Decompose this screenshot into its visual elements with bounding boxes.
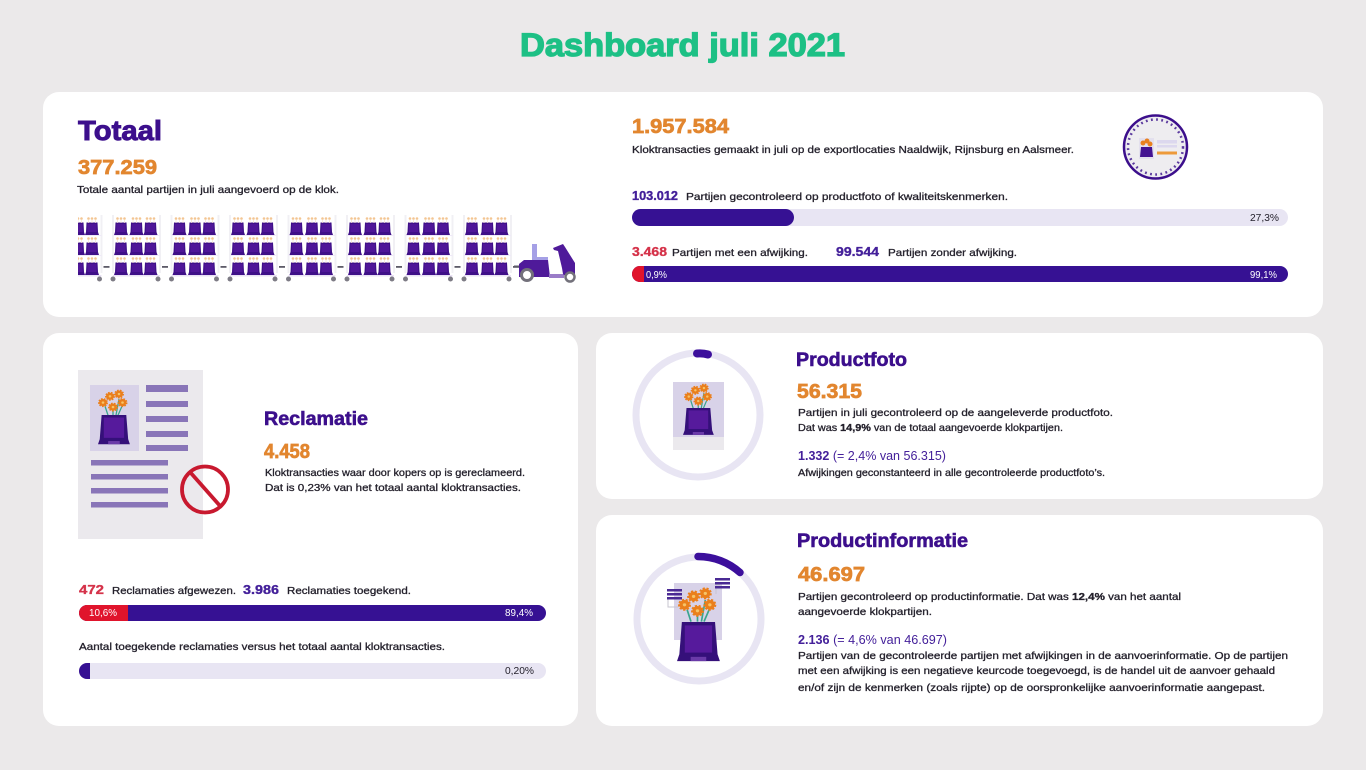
label: photo-checked lots: 103.012	[632, 188, 678, 203]
label: deviations: 99.544	[836, 244, 880, 259]
icon: information progress ring	[637, 556, 761, 681]
icon: photo progress ring	[636, 353, 760, 477]
bar: 10,6% vs 89,4%: 10,6%	[89, 608, 117, 619]
text: photo deviations description: Afwijkingen geconstanteerd in alle gecontroleerde productfoto’s.	[798, 467, 1105, 479]
bar: 10,6% vs 89,4%	[79, 605, 546, 621]
number: photos checked: 56.315	[797, 381, 862, 403]
bar: 0,9% vs 99,1%: 0,9%	[646, 270, 667, 281]
panel: reclamatie	[43, 333, 578, 726]
text: claims description: Dat is 0,23% van het totaal aantal kloktransacties.	[265, 482, 521, 494]
label: claims rejected and granted: 3.986	[243, 582, 279, 597]
heading: reclamatie: Reclamatie	[264, 409, 368, 430]
text: information deviations description: Partijen van de gecontroleerde partijen met afwijkingen in de aanvoerinformatie. Op de partijen	[798, 650, 1288, 662]
heading: productfoto: Productfoto	[796, 350, 907, 371]
bar: 0,20%	[79, 663, 546, 679]
text: claims description: Kloktransacties waar door kopers op is gereclameerd.	[265, 467, 525, 479]
label: photo-checked lots: Partijen gecontroleerd op productfoto of kwaliteitskenmerken.	[686, 191, 1008, 203]
title: Dashboard juli 2021	[520, 27, 845, 63]
text: information description: Partijen gecontroleerd op productinformatie. Dat was 12,4% van het aantal	[798, 591, 1181, 603]
text: information description: aangevoerde klokpartijen.	[798, 606, 932, 618]
text: information deviations description	[798, 650, 1288, 694]
text: claims description	[265, 467, 525, 494]
bar: 27,3%: 27,3%	[1250, 213, 1279, 224]
number: clock transactions: 1.957.584	[632, 116, 730, 138]
icon: rejected document	[78, 370, 228, 539]
label: deviations	[632, 244, 1017, 259]
label: claims rejected and granted	[79, 582, 411, 597]
bar: 0,9% vs 99,1%: 99,1%	[1250, 270, 1277, 281]
icon: trolley train	[52, 215, 519, 282]
bar: 10,6% vs 89,4%: 89,4%	[505, 608, 533, 619]
number: claims: 4.458	[264, 441, 310, 463]
label: claims rejected and granted: Reclamaties toegekend.	[287, 585, 411, 597]
heading: totaal: Totaal	[78, 115, 162, 146]
text: information deviations description: met een afwijking is een negatieve keurcode toegevoegd, is de handel uit de aanvoer gehaald	[798, 665, 1275, 677]
label: deviations: Partijen met een afwijking.	[672, 247, 808, 259]
number: photo deviations: 1.332 (= 2,4% van 56.315)	[798, 448, 946, 463]
text: information deviations description: en/of zijn de kenmerken (zoals rijpte) op de oorspronkelijke aanvoerinformatie aangepast.	[798, 682, 1265, 694]
text: information description	[798, 591, 1181, 618]
icon: auction clock	[1124, 116, 1187, 178]
number: total lots: 377.259	[78, 157, 157, 179]
number: information checks: 46.697	[798, 564, 865, 586]
text: clock transactions description: Kloktransacties gemaakt in juli op de exportlocaties Naaldwijk, Rijnsburg en Aalsmeer.	[632, 144, 1074, 156]
icon: tug vehicle	[514, 244, 575, 282]
text: photos description: Partijen in juli gecontroleerd op de aangeleverde productfoto.	[798, 407, 1113, 419]
panel: productfoto	[596, 333, 1323, 499]
text: photos description	[798, 407, 1113, 434]
bar: 27,3%	[632, 209, 1288, 226]
panel: totaal	[43, 92, 1323, 317]
bar: 0,9% vs 99,1%	[632, 266, 1288, 282]
number: information deviations: 2.136 (= 4,6% van 46.697)	[798, 632, 947, 647]
label: deviations: Partijen zonder afwijking.	[888, 247, 1017, 259]
label: deviations: 3.468	[632, 244, 667, 259]
panel: productinformatie	[596, 515, 1323, 726]
text: granted claims label: Aantal toegekende reclamaties versus het totaal aantal kloktransacties.	[79, 641, 445, 653]
text: photos description: Dat was 14,9% van de totaal aangevoerde klokpartijen.	[798, 422, 1063, 434]
label: claims rejected and granted: 472	[79, 582, 104, 597]
label: claims rejected and granted: Reclamaties afgewezen.	[112, 585, 236, 597]
bar: 0,20%: 0,20%	[505, 666, 534, 677]
label: photo-checked lots	[632, 188, 1008, 203]
text: total lots description: Totale aantal partijen in juli aangevoerd op de klok.	[77, 184, 339, 196]
heading: productinformatie: Productinformatie	[797, 531, 968, 552]
